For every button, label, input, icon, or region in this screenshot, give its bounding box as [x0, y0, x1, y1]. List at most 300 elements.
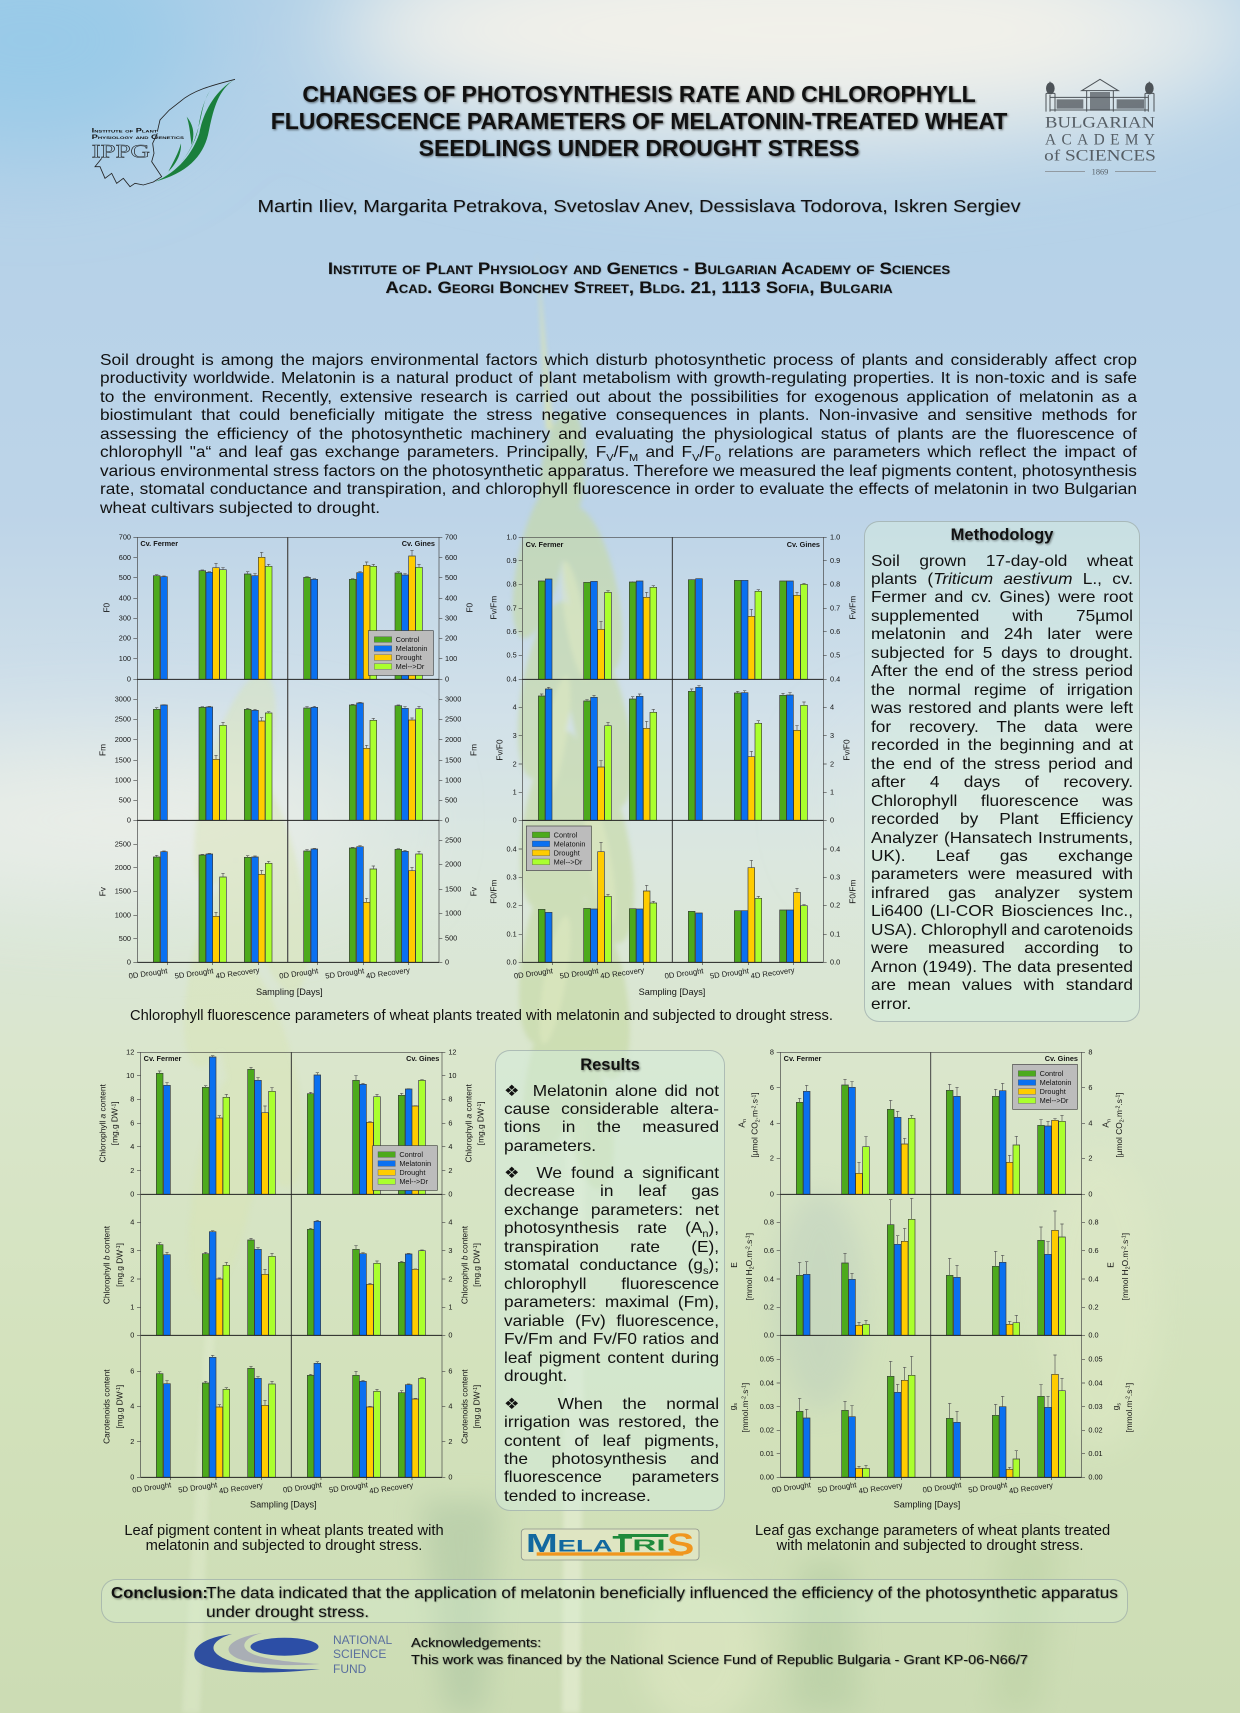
introduction text: assessing the efficiency of the photosynthetic machinery and evaluating the physiological status of plants are the fluorescence of: [100, 426, 1137, 443]
axis labels: F0/Fm: [488, 880, 498, 904]
results text: exchange parameters: net: [504, 1202, 719, 1219]
axis labels: -2: [1122, 1246, 1128, 1251]
axis labels: 2: [448, 1437, 452, 1446]
axis labels: [mmol.m: [1124, 1401, 1134, 1432]
error bars: [798, 1079, 1064, 1469]
axes: [133, 537, 442, 965]
title: [271, 81, 1010, 161]
methodology text: were measured according to: [870, 940, 1133, 957]
affiliation: [328, 259, 950, 297]
axis labels: [mmol.m: [740, 1401, 750, 1432]
axis labels: 0D Drought: [664, 966, 705, 981]
axis labels: 0.0: [830, 958, 840, 967]
axis labels: 4D Recovery: [218, 1481, 264, 1496]
methodology text: supplemented with 75µmol: [870, 608, 1133, 625]
axis labels: 0.4: [506, 675, 517, 684]
conclusion text: under drought stress.: [206, 1604, 369, 1621]
axis labels: -1: [473, 1245, 479, 1250]
axis labels: Sampling [Days]: [250, 1500, 317, 1510]
axis labels: ]: [471, 1385, 481, 1387]
axis labels: 0.00: [760, 1473, 774, 1482]
axis labels: n: [742, 1119, 748, 1122]
legend: Control: [554, 830, 578, 839]
legend: Mel-->Dr: [554, 857, 583, 866]
axis labels: [488, 533, 857, 997]
axis labels: 0D Drought: [282, 1480, 323, 1495]
logo: National Science Fund: FUND: [333, 1662, 367, 1676]
methodology text: recorded in the beginning and at: [870, 737, 1133, 754]
legend: Drought: [396, 653, 422, 662]
axis labels: 6: [1088, 1083, 1092, 1092]
axis labels: 0.4: [830, 675, 840, 684]
axis labels: [97, 533, 479, 997]
introduction text: chlorophyll "a“ and leaf gas exchange parameters. Principally, FV/FM and FV/F0 relations are parameters which reflect the impact of: [100, 444, 1137, 464]
methodology text: Analyzer (Hansatech Instruments,: [870, 830, 1133, 847]
legend: Melatonin: [396, 644, 427, 653]
axis labels: Sampling [Days]: [256, 987, 323, 997]
axis labels: 500: [119, 573, 131, 582]
caption: chlorophyll fluorescence: Chlorophyll fluorescence parameters of wheat plants treated with melatonin and subjected to drought stress.: [130, 1008, 833, 1024]
axis labels: 400: [445, 594, 457, 603]
axis labels: Cv. Gines: [406, 1054, 439, 1063]
logo: MelaTris: T: [612, 1531, 632, 1557]
methodology text: melatonin and 24h later were: [870, 626, 1133, 643]
panel: methodology: [864, 520, 1140, 1022]
axis labels: 3: [130, 1246, 134, 1255]
caption: leaf pigments: [124, 1522, 444, 1554]
axis labels: 0: [127, 816, 131, 825]
axis labels: 2: [513, 759, 517, 768]
axis labels: [mmol H: [744, 1269, 754, 1300]
axis labels: 5D Drought: [178, 1480, 219, 1495]
axis labels: ]: [471, 1243, 481, 1245]
axis labels: 0.6: [1088, 1246, 1099, 1255]
axis labels: ]: [475, 1101, 485, 1104]
axis labels: -2: [1116, 1105, 1122, 1110]
axis labels: Fv: [469, 886, 479, 896]
axis labels: 0D Drought: [922, 1480, 963, 1495]
axis labels: 0.5: [830, 651, 840, 660]
introduction text: Soil drought is among the majors environmental factors which disturb photosynthetic process of plants and considerably affect crop: [100, 352, 1137, 369]
axis labels: ]: [1114, 1092, 1124, 1095]
introduction text: rate, stomatal conductance and transpiration, and chlorophyll fluorescence in order to evaluate the effects of melatonin in two Bulgarian: [100, 481, 1137, 498]
axis labels: 4D Recovery: [365, 966, 411, 981]
bars: melatonin: [803, 1087, 1051, 1477]
axis labels: 8: [448, 1095, 452, 1104]
axis labels: 0.7: [830, 604, 840, 613]
axis labels: ]: [750, 1092, 760, 1095]
acknowledgements: This work was financed by the National Science Fund of Republic Bulgaria - Grant KP-06-N66/7: [410, 1652, 1027, 1667]
logo: Institute of Plant Physiology and Genetics: [92, 78, 236, 188]
axis labels: 500: [445, 796, 457, 805]
conclusion label: Conclusion:: [110, 1585, 207, 1602]
results text: chlorophyll fluorescence: [504, 1276, 719, 1293]
logo: National Science Fund: NATIONAL: [333, 1633, 392, 1647]
results text: cause considerable altera-: [504, 1101, 719, 1118]
axis labels: 0.04: [1088, 1378, 1103, 1387]
axis labels: [mg.g DW: [114, 1250, 124, 1287]
methodology text: Soil grown 17-day-old wheat: [870, 552, 1133, 570]
axis labels: 0.05: [1088, 1355, 1103, 1364]
axis labels: A: [736, 1122, 746, 1128]
axis labels: 8: [770, 1048, 774, 1057]
axis labels: 1500: [445, 756, 461, 765]
axis labels: -1: [116, 1245, 122, 1250]
axis labels: 2500: [115, 715, 131, 724]
axis labels: 600: [119, 553, 131, 562]
axis labels: 2500: [445, 836, 461, 845]
methodology text: USA). Chlorophyll and carotenoids: [870, 922, 1133, 939]
results text: leaf pigment content during: [504, 1350, 719, 1367]
axis labels: 1: [448, 1303, 452, 1312]
logo: MelaTris: [520, 1528, 700, 1562]
axis labels: 2: [130, 1166, 134, 1175]
logo: Bulgarian Academy of Sciences: of SCIENCES: [1044, 148, 1156, 165]
axis labels: 2: [1088, 1154, 1092, 1163]
caption: leaf pigments: melatonin and subjected to drought stress.: [146, 1538, 422, 1554]
axis labels: 1000: [115, 776, 131, 785]
axis labels: 4D Recovery: [750, 966, 795, 981]
results text: ❖ When the normal: [504, 1394, 719, 1413]
axis labels: .s: [744, 1240, 754, 1246]
axis labels: 0: [127, 958, 131, 967]
chart: leaf gas exchange: [730, 1048, 1134, 1510]
methodology text: parameters were measured with: [870, 866, 1133, 883]
axis labels: -1: [1122, 1235, 1128, 1240]
axis labels: 100: [119, 654, 131, 663]
axis labels: 2: [448, 1166, 452, 1175]
axis labels: 3000: [115, 695, 131, 704]
methodology text: Li6400 (LI-COR Biosciences Inc.,: [870, 903, 1133, 920]
methodology text: recorded by Plant Efficiency: [870, 811, 1133, 828]
axis labels: 0.6: [764, 1246, 774, 1255]
methodology text: infrared gas analyzer system: [870, 885, 1133, 902]
axis labels: -1: [746, 1235, 752, 1240]
axis labels: -2: [742, 1396, 748, 1401]
axis labels: O.m: [1120, 1251, 1130, 1266]
methodology text: Chlorophyll fluorescence was: [870, 793, 1133, 810]
logo: Institute of Plant Physiology and Genetics: Institute of Plant: [92, 127, 158, 134]
axis labels: 700: [119, 533, 131, 542]
axis labels: -1: [111, 1104, 117, 1108]
axis labels: 1: [130, 1303, 134, 1312]
axis labels: .s: [750, 1099, 760, 1106]
axis labels: 4: [448, 1142, 452, 1151]
results text: decrease in leaf gas: [504, 1183, 719, 1200]
axis labels: 12: [448, 1048, 456, 1057]
axis labels: 0.1: [830, 930, 840, 939]
axis labels: 2: [750, 1266, 756, 1269]
logo: Bulgarian Academy of Sciences: ACADEMY: [1045, 131, 1155, 148]
axis labels: [µmol CO: [1114, 1122, 1124, 1158]
axis labels: 200: [119, 634, 131, 643]
axis labels: ]: [744, 1233, 754, 1235]
results text: Fv/Fm and Fv/F0 ratios and: [504, 1331, 719, 1348]
results text: stomatal conductance (gs);: [504, 1257, 719, 1277]
axis labels: 0.4: [764, 1274, 774, 1283]
bars: drought: [213, 556, 415, 962]
axis labels: Cv. Fermer: [144, 1054, 182, 1063]
axis labels: 0D Drought: [771, 1480, 812, 1495]
axis labels: 4D Recovery: [215, 966, 260, 981]
axis labels: 0.01: [1088, 1449, 1103, 1458]
axis labels: 5D Drought: [559, 966, 600, 981]
axis labels: [mg.g DW: [114, 1392, 124, 1429]
logo: Institute of Plant Physiology and Genetics: IPPG: [92, 141, 150, 162]
axis labels: 1000: [445, 909, 461, 918]
axis labels: 500: [119, 796, 131, 805]
axis labels: 1500: [115, 756, 131, 765]
axis labels: 4: [513, 703, 517, 712]
axis labels: Chlorophyll b content: [102, 1225, 112, 1304]
axis labels: 1.0: [830, 533, 840, 542]
caption: gas exchange: with melatonin and subjected to drought stress.: [776, 1538, 1083, 1554]
axis labels: 0.5: [506, 651, 517, 660]
axis labels: 2500: [115, 840, 131, 849]
axis labels: 3: [448, 1246, 452, 1255]
axis labels: [98, 1048, 485, 1510]
axis labels: 0.9: [506, 556, 517, 565]
methodology text: Arnon (1949). The data presented: [870, 959, 1133, 976]
axis labels: 0: [130, 1190, 134, 1199]
logo: MelaTris: RI: [632, 1538, 666, 1555]
legend: [526, 826, 591, 871]
axis labels: [mmol H: [1120, 1269, 1130, 1300]
heading: results: Results: [580, 1056, 640, 1074]
axis labels: [mg.g DW: [110, 1108, 120, 1145]
acknowledgements: [410, 1635, 1028, 1668]
axis labels: 0: [130, 1331, 134, 1340]
methodology text: subjected for 5 days to drought.: [870, 645, 1133, 662]
axis labels: 0: [445, 816, 449, 825]
axis labels: 5D Drought: [174, 966, 215, 981]
axis labels: [mg.g DW: [471, 1392, 481, 1429]
axis labels: .m: [750, 1110, 760, 1119]
legend: Control: [396, 635, 420, 644]
logo: National Science Fund: [194, 1633, 392, 1676]
results text: [504, 1080, 719, 1505]
logo: Institute of Plant Physiology and Genetics: Physiology and Genetics: [92, 134, 184, 141]
axis labels: 10: [448, 1071, 456, 1080]
axis labels: 0: [448, 1190, 452, 1199]
axis labels: .s: [1120, 1240, 1130, 1246]
axis labels: 3: [830, 731, 834, 740]
results text: fluorescence parameters: [504, 1469, 719, 1486]
axis labels: ]: [114, 1243, 124, 1245]
axis labels: g: [1111, 1406, 1121, 1410]
introduction text: various environmental stress factors on the photosynthetic apparatus. Therefore we measured the leaf pigments content, photosynthesis: [100, 463, 1137, 480]
results text: the photosynthesis and: [504, 1451, 719, 1468]
axis labels: 5D Drought: [709, 966, 750, 981]
legend: Mel-->Dr: [396, 662, 425, 671]
affiliation: Institute of Plant Physiology and Genetics - Bulgarian Academy of Sciences: [328, 259, 950, 278]
legend: Melatonin: [1040, 1078, 1071, 1087]
axis labels: 0.2: [764, 1303, 774, 1312]
axis labels: 6: [448, 1367, 452, 1376]
axis labels: Fv/F0: [495, 739, 505, 761]
axis labels: 3: [513, 731, 517, 740]
results text: parameters.: [504, 1138, 596, 1155]
logo: Bulgarian Academy of Sciences: BULGARIAN: [1045, 114, 1156, 131]
axis labels: 5D Drought: [817, 1480, 858, 1495]
axis labels: 2000: [445, 860, 461, 869]
results text: drought.: [504, 1368, 567, 1385]
axes: [137, 1052, 445, 1480]
axis labels: -1: [116, 1387, 122, 1392]
axis labels: 2: [130, 1437, 134, 1446]
axis labels: Fv/Fm: [488, 596, 498, 619]
error bars: [158, 1056, 424, 1407]
axis labels: 8: [130, 1095, 134, 1104]
caption: leaf pigments: Leaf pigment content in wheat plants treated with: [124, 1522, 444, 1538]
bars: melatonin plus drought: [863, 1118, 1065, 1477]
affiliation: Acad. Georgi Bonchev Street, Bldg. 21, 1113 Sofia, Bulgaria: [385, 278, 893, 297]
axis labels: 4: [130, 1402, 134, 1411]
results text: ❖ We found a significant: [504, 1163, 719, 1182]
introduction text: wheat cultivars subjected to drought.: [100, 500, 380, 517]
chart: chlorophyll fluorescence F0, Fm, Fv: [97, 533, 479, 997]
axis labels: 0.8: [1088, 1218, 1099, 1227]
axis labels: O.m: [744, 1251, 754, 1266]
methodology text: are mean values with standard: [870, 977, 1133, 994]
axis labels: Fv: [97, 886, 107, 896]
axis labels: -2: [746, 1246, 752, 1251]
axis labels: 0.1: [506, 930, 517, 939]
panel: results: [495, 1050, 725, 1511]
methodology text: After the end of the stress period: [870, 663, 1133, 680]
axis labels: 0.8: [764, 1218, 774, 1227]
axis labels: 1000: [115, 911, 131, 920]
axis labels: -1: [751, 1094, 757, 1099]
chart: chlorophyll fluorescence ratios: [488, 533, 857, 997]
methodology text: [870, 552, 1133, 1013]
axis labels: ]: [110, 1101, 120, 1104]
axis labels: 0D Drought: [513, 966, 554, 981]
axes: [777, 1052, 1085, 1480]
bars: control: [796, 1085, 1044, 1477]
axis labels: 300: [445, 614, 457, 623]
axis labels: 0: [445, 675, 449, 684]
axis labels: Fm: [97, 744, 107, 756]
legend: [373, 1146, 437, 1190]
bars: melatonin: [161, 572, 408, 962]
axis labels: E: [1105, 1262, 1115, 1268]
legend: [1013, 1064, 1077, 1109]
axis labels: 4: [448, 1402, 452, 1411]
axis labels: 0: [445, 958, 449, 967]
axis labels: Carotenoids content: [102, 1369, 112, 1444]
axis labels: 0.0: [1088, 1331, 1099, 1340]
axis labels: [727, 1048, 1134, 1510]
axis labels: 2000: [115, 863, 131, 872]
axis labels: 0.8: [506, 580, 517, 589]
methodology text: for recovery. The data were: [870, 719, 1133, 736]
introduction text: [100, 352, 1137, 517]
legend: Melatonin: [399, 1159, 431, 1168]
chart: leaf pigment content: [98, 1048, 485, 1510]
axis labels: 4: [830, 703, 834, 712]
caption: gas exchange: Leaf gas exchange parameters of wheat plants treated: [755, 1522, 1110, 1538]
legend: Drought: [399, 1168, 425, 1177]
bars: melatonin plus drought: [605, 584, 807, 962]
axis labels: 700: [445, 533, 457, 542]
title: FLUORESCENCE PARAMETERS OF MELATONIN-TREATED WHEAT: [271, 108, 1007, 134]
axis labels: 2: [1120, 1119, 1126, 1122]
axis labels: -1: [742, 1385, 748, 1390]
axis labels: Cv. Gines: [402, 539, 435, 548]
introduction text: productivity worldwide. Melatonin is a natural product of plant metabolism with growth-regulating properties. It is non-toxic and is safe: [100, 370, 1137, 387]
axis labels: 4D Recovery: [600, 966, 645, 981]
caption: gas exchange: [755, 1522, 1110, 1554]
axis labels: 0.03: [760, 1402, 774, 1411]
axis labels: 4D Recovery: [1008, 1481, 1054, 1496]
axis labels: 6: [130, 1119, 134, 1128]
axis labels: -1: [1116, 1094, 1122, 1099]
axis labels: [mg.g DW: [471, 1250, 481, 1287]
logo: MelaTris: M: [526, 1528, 558, 1558]
axis labels: 0D Drought: [279, 966, 320, 981]
axis labels: 600: [445, 553, 457, 562]
axis labels: 0.6: [830, 627, 840, 636]
axis labels: 500: [119, 934, 131, 943]
axis labels: 0: [448, 1473, 452, 1482]
results text: content of leaf pigments,: [504, 1433, 719, 1450]
axis labels: 0: [130, 1473, 134, 1482]
heading: methodology: Methodology: [951, 526, 1053, 544]
bars: control: [538, 580, 786, 962]
axis labels: 6: [770, 1083, 774, 1092]
legend: Control: [399, 1150, 423, 1159]
introduction text: biostimulant that could beneficially mitigate the stress negative consequences in plants. Non-invasive and sensitive methods for: [100, 407, 1137, 424]
axis labels: 5D Drought: [328, 1480, 369, 1495]
axis labels: 0: [513, 816, 517, 825]
axis labels: 0.01: [760, 1449, 774, 1458]
axis labels: 0.05: [760, 1355, 774, 1364]
axis labels: 1.0: [506, 533, 517, 542]
axis labels: Fm: [469, 744, 479, 756]
axis labels: Cv. Gines: [787, 540, 820, 549]
bars: melatonin plus drought: [223, 1080, 425, 1477]
axis labels: 1000: [445, 776, 461, 785]
conclusion text: The data indicated that the application of melatonin beneficially influenced the efficiency of the photosynthetic apparatus: [206, 1585, 1117, 1602]
error bars: [540, 578, 806, 906]
axis labels: 1500: [115, 887, 131, 896]
legend: Drought: [554, 848, 580, 857]
axis labels: 6: [130, 1367, 134, 1376]
axis labels: 0.4: [1088, 1274, 1099, 1283]
axis labels: 3000: [445, 695, 461, 704]
axis labels: 1: [830, 788, 834, 797]
axis labels: 0.6: [506, 627, 517, 636]
axis labels: [µmol CO: [750, 1122, 760, 1158]
axis labels: 0.3: [830, 873, 840, 882]
axis labels: 0D Drought: [128, 966, 169, 981]
axis labels: 0.3: [506, 873, 517, 882]
bars: melatonin plus drought: [220, 566, 422, 962]
axis labels: 200: [445, 634, 457, 643]
bars: melatonin: [545, 579, 793, 962]
axis labels: 0: [830, 816, 834, 825]
axis labels: 4: [448, 1218, 452, 1227]
axis labels: 0.7: [506, 604, 517, 613]
axis labels: Cv. Fermer: [140, 539, 178, 548]
axis labels: Cv. Gines: [1045, 1054, 1078, 1063]
axis labels: 500: [445, 934, 457, 943]
results text: tended to increase.: [504, 1488, 650, 1505]
bars: control: [156, 1069, 405, 1477]
axis labels: [mg.g DW: [475, 1108, 485, 1145]
axis labels: F0: [101, 602, 111, 613]
